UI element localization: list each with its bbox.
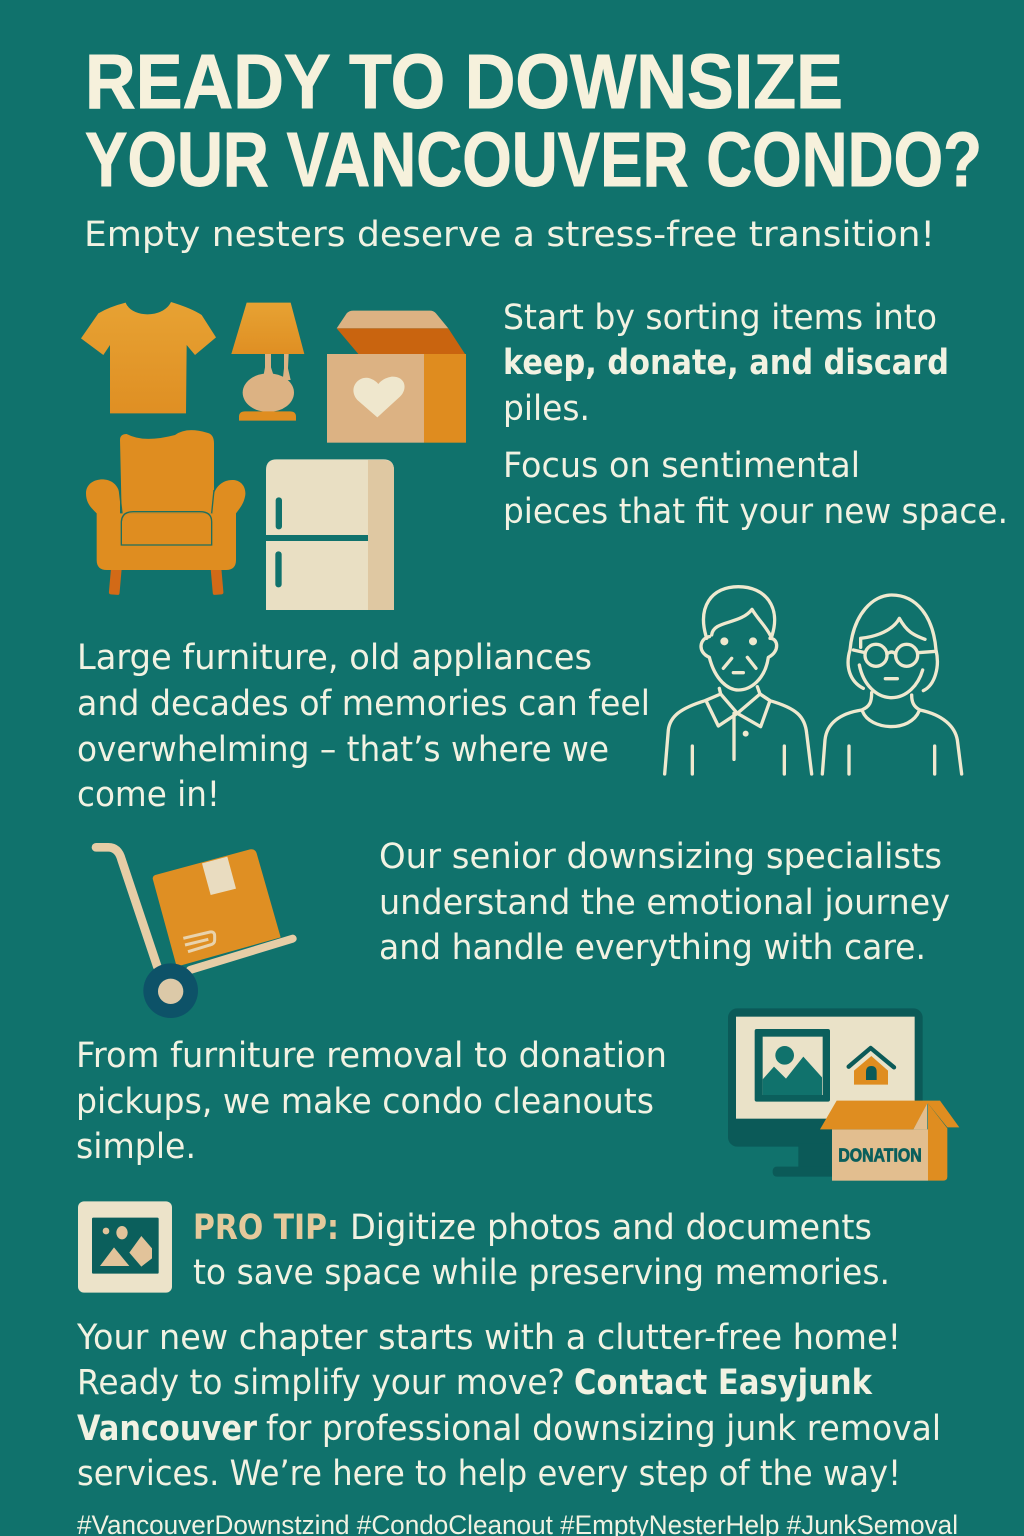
icon: hand truck with box [96,847,293,1018]
icon: monitor and donation box [728,1008,959,1181]
text block: specialists [379,837,950,968]
woman [822,595,962,774]
icon: digitize photo [78,1201,172,1293]
text block: furniture removal: From furniture removal to donation [76,1036,667,1076]
donation box: DONATION [838,1145,922,1166]
title: READY TO DOWNSIZE [85,39,843,125]
monitor [728,1008,923,1177]
icon: refrigerator [266,459,394,610]
text block: call to action: Ready to simplify your move? [77,1363,565,1403]
text block: sorting advice: keep, donate, and discard [503,343,949,383]
text block: pro tip: to save space while preserving memories. [193,1253,890,1293]
text block: furniture removal: pickups, we make condo cleanouts [76,1082,654,1122]
text block: sorting advice: Start by sorting items into [503,298,937,338]
text block: specialists: understand the emotional journey [379,883,950,923]
text block: pro tip: PRO TIP: [193,1208,339,1248]
text block: furniture removal: simple. [76,1127,196,1167]
icon: donation box with heart [327,311,466,443]
text block: furniture removal [76,1036,667,1167]
icon: lamp [231,303,304,421]
icon: older couple [665,587,962,774]
text block: specialists: and handle everything with care. [379,928,926,968]
text block: overwhelming [77,638,650,815]
text block: sorting advice: piles. [503,389,590,429]
title [85,39,982,203]
text block: call to action: Contact Easyjunk [574,1363,873,1403]
text block: overwhelming: and decades of memories can feel [77,684,650,724]
text block: overwhelming: overwhelming – that’s where we [77,730,609,770]
text block: specialists: Our senior downsizing specialists [379,837,942,877]
text block: call to action: for professional downsizing junk removal [266,1409,941,1449]
icon: armchair [86,430,245,595]
text block: sorting advice [503,298,1008,532]
text block: pro tip [193,1208,890,1293]
text block: call to action [76,1318,941,1494]
text block: call to action: services. We’re here to help every step of the way! [77,1454,901,1494]
text block: call to action: Your new chapter starts with a clutter-free home! [76,1318,901,1358]
text block: overwhelming: Large furniture, old appliances [77,638,592,678]
icon: t-shirt [81,302,216,413]
text block: call to action: Vancouver [77,1409,258,1449]
text block: overwhelming: come in! [77,775,220,815]
subtitle: Empty nesters deserve a stress-free transition! [84,215,935,255]
text block: pro tip: Digitize photos and documents [350,1208,872,1248]
donation box [820,1101,959,1181]
icons: household items [81,302,466,610]
text block: sorting advice: Focus on sentimental [503,446,860,486]
man [665,587,812,774]
